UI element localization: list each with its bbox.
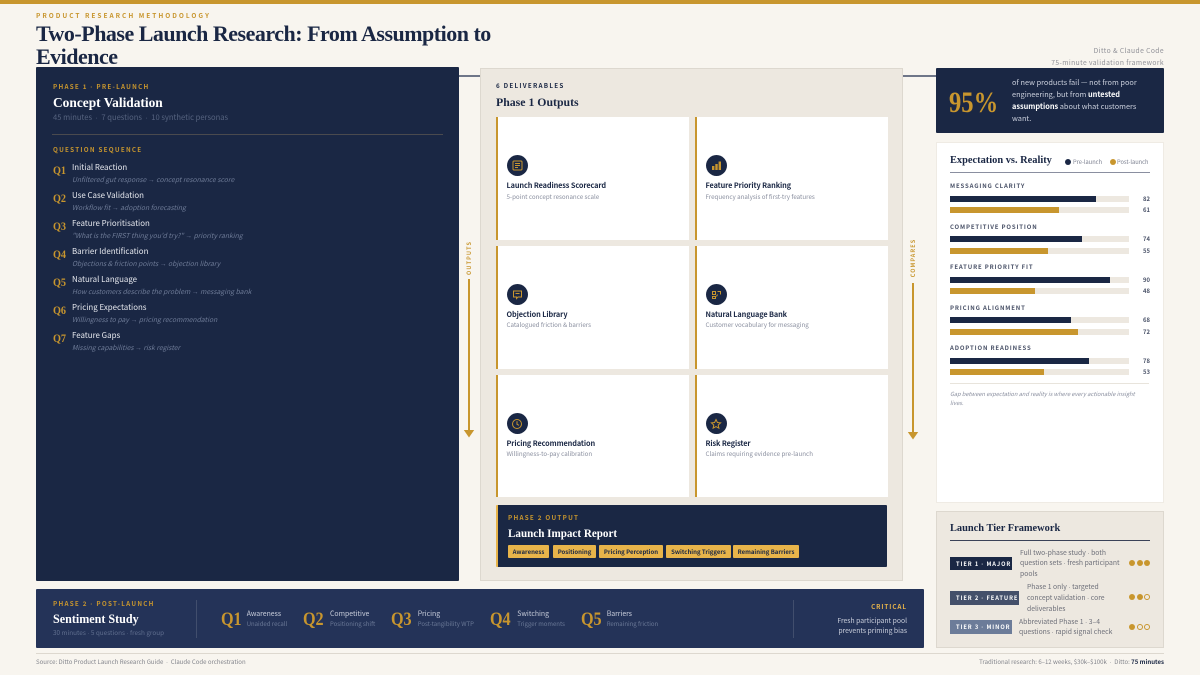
arrow: outputs: [464, 241, 474, 438]
phase 2 output label: PHASE 2 OUTPUT: [508, 513, 579, 522]
question Q2: [303, 608, 376, 630]
tier 3: TIER 3 · MINOR: [956, 622, 1011, 631]
header attribution: [1051, 45, 1164, 67]
callout: critical: CRITICAL: [871, 602, 907, 611]
tier 3: questions · rapid signal check: [1019, 626, 1112, 636]
arrow: compares: [908, 239, 918, 440]
Q4: [53, 246, 221, 268]
card: natural language: [695, 246, 888, 369]
tag: positioning: [553, 545, 596, 558]
tag: remaining barriers: [733, 545, 799, 558]
tier 2: [950, 581, 1150, 613]
tier 2: TIER 2 · FEATURE: [956, 593, 1018, 602]
chart title: Expectation vs. Reality: [950, 155, 1052, 166]
panel: phase 2 sentiment study: [36, 589, 924, 648]
icon: document: [506, 155, 528, 176]
card: risk register: Risk Register: [706, 439, 750, 449]
question Q3: Pricing: [418, 608, 440, 618]
report heading: Launch Impact Report: [508, 528, 617, 540]
phase 1 meta: 45 minutes · 7 questions · 10 synthetic personas: [53, 112, 228, 123]
card: pricing: Pricing Recommendation: [506, 439, 595, 449]
tag: pricing perception: [599, 545, 663, 558]
Q5: How customers describe the problem → messaging bank: [72, 286, 251, 296]
metric: pricing alignment: [950, 303, 1150, 336]
phase 1 label: PHASE 1 · PRE-LAUNCH: [53, 82, 150, 91]
metric: adoption readiness: [950, 343, 1150, 376]
metric: pricing alignment: PRICING ALIGNMENT: [950, 303, 1026, 312]
Q6: Pricing Expectations: [72, 302, 147, 313]
callout: critical: Fresh participant pool: [837, 614, 907, 624]
metric: messaging clarity: 82: [1143, 194, 1150, 203]
Q6: Q6: [53, 303, 66, 317]
stat description: engineering, but from untested: [1012, 89, 1120, 100]
chart note: lives.: [950, 398, 964, 407]
callout: critical: [837, 602, 907, 635]
title: Evidence: [36, 44, 118, 69]
metric: adoption readiness: 78: [1143, 356, 1150, 365]
Q7: [53, 330, 181, 352]
question sequence label: QUESTION SEQUENCE: [53, 145, 142, 154]
card: objection library: [496, 246, 689, 369]
stat description: assumptions about what customers: [1012, 101, 1136, 112]
icon: bars: [706, 155, 726, 176]
Q6: [53, 302, 218, 324]
tier 2: concept validation · core: [1027, 592, 1105, 602]
question Q4: [490, 608, 565, 630]
tier 1: [950, 546, 1150, 578]
Q2: Use Case Validation: [72, 190, 144, 201]
question Q1: Unaided recall: [247, 619, 287, 628]
tag: pricing perception: Pricing Perception: [604, 547, 658, 556]
metric: pricing alignment: 68: [1143, 315, 1150, 324]
stat description: of new products fail — not from poor: [1012, 77, 1137, 88]
outputs heading: Phase 1 Outputs: [496, 95, 579, 109]
tier 1: question sets · fresh participant: [1020, 557, 1120, 567]
card: risk register: Claims requiring evidence pre-launch: [706, 449, 813, 458]
Q3: "What is the FIRST thing you'd try?" → priority ranking: [72, 230, 243, 240]
icon: clock: [506, 413, 528, 434]
question Q2: Competitive: [330, 608, 369, 618]
question Q1: Q1: [221, 609, 242, 630]
Q1: Q1: [53, 163, 66, 177]
chart note: Gap between expectation and reality is where every actionable insight: [950, 389, 1135, 398]
Q2: Workflow fit → adoption forecasting: [72, 202, 186, 212]
Q5: Q5: [53, 275, 66, 289]
question Q4: Q4: [490, 609, 511, 630]
legend: Post-launch: [1117, 157, 1148, 166]
legend: [1065, 157, 1148, 166]
connector: left panel to outputs: [459, 75, 480, 76]
tier 2: deliverables: [1027, 603, 1065, 613]
metric: competitive position: 55: [1143, 246, 1150, 255]
panel: launch tier framework: [936, 511, 1164, 648]
metric: messaging clarity: MESSAGING CLARITY: [950, 181, 1025, 190]
panel: expectation vs reality chart: [936, 142, 1164, 503]
question Q2: Q2: [303, 609, 324, 630]
metric: messaging clarity: 61: [1143, 205, 1150, 214]
card: natural language: Customer vocabulary for messaging: [706, 320, 809, 329]
Q7: Missing capabilities → risk register: [72, 342, 180, 352]
question Q5: Remaining friction: [607, 619, 658, 628]
top accent bar: [0, 0, 1200, 4]
question Q3: Post-tangibility WTP: [418, 619, 474, 628]
tier 1: Full two-phase study · both: [1020, 546, 1106, 556]
Q1: Unfiltered gut response → concept resonance score: [72, 174, 234, 184]
metric: adoption readiness: 53: [1143, 367, 1150, 376]
question Q4: Switching: [517, 608, 549, 618]
card: pricing: Willingness-to-pay calibration: [506, 449, 592, 458]
metric: feature priority fit: 90: [1143, 275, 1150, 284]
metric: competitive position: 74: [1143, 234, 1150, 243]
question Q1: [221, 608, 287, 630]
callout: phase 2 output: [496, 505, 887, 567]
connector: outputs to stat: [903, 75, 936, 76]
tag: positioning: Positioning: [558, 547, 591, 556]
phase 2 label: PHASE 2 · POST-LAUNCH: [53, 599, 155, 608]
tier 2: Phase 1 only · targeted: [1027, 581, 1099, 591]
card: feature ranking: [695, 117, 888, 240]
outputs label: OUTPUTS: [465, 241, 473, 275]
metric: messaging clarity: [950, 181, 1150, 214]
stat description: want.: [1012, 113, 1031, 124]
Q2: Q2: [53, 191, 66, 205]
title: Two-Phase Launch Research: From Assumption to: [36, 21, 491, 46]
panel: phase 1 concept validation: [36, 67, 459, 581]
question Q1: Awareness: [247, 608, 281, 618]
question Q5: Barriers: [607, 608, 632, 618]
card: scorecard: 5-point concept resonance scale: [506, 192, 599, 201]
Q4: Objections & friction points → objection library: [72, 258, 220, 268]
card: feature ranking: Frequency analysis of first-try features: [706, 192, 815, 201]
tier 3: [950, 616, 1150, 636]
Q3: [53, 218, 244, 240]
Q4: Q4: [53, 247, 66, 261]
footer source: Source: Ditto Product Launch Research Guide · Claude Code orchestration: [36, 657, 246, 666]
callout: critical: prevents priming bias: [838, 625, 907, 635]
Q1: Initial Reaction: [72, 162, 127, 173]
Q5: Natural Language: [72, 274, 137, 285]
chart note: [950, 389, 1136, 407]
Q4: Barrier Identification: [72, 246, 148, 257]
icon: star: [706, 413, 726, 434]
card: scorecard: Launch Readiness Scorecard: [506, 181, 606, 191]
question Q5: [581, 608, 658, 630]
metric: feature priority fit: 48: [1143, 286, 1150, 295]
metric: feature priority fit: FEATURE PRIORITY FIT: [950, 262, 1033, 271]
card: objection library: Objection Library: [506, 310, 567, 320]
tier 1: pools: [1020, 568, 1038, 578]
card: feature ranking: Feature Priority Ranking: [706, 181, 791, 191]
metric: pricing alignment: 72: [1143, 327, 1150, 336]
Q3: Feature Prioritisation: [72, 218, 150, 229]
card: natural language: Natural Language Bank: [706, 310, 787, 320]
footer comparison: Traditional research: 6–12 weeks, $30k–$100k · Ditto: 75 minutes: [979, 657, 1164, 666]
metric: feature priority fit: [950, 262, 1150, 295]
Q7: Q7: [53, 331, 66, 345]
stat description: [1012, 77, 1137, 124]
tag: remaining barriers: Remaining Barriers: [738, 547, 794, 556]
icon: speech bubble: [506, 284, 528, 305]
question Q5: Q5: [581, 609, 601, 630]
deliverables label: 6 DELIVERABLES: [496, 81, 565, 90]
tag: switching triggers: [666, 545, 731, 558]
card: scorecard: [496, 117, 689, 240]
legend: Pre-launch: [1073, 157, 1102, 166]
metric: adoption readiness: ADOPTION READINESS: [950, 343, 1032, 352]
panel: 95 percent stat: [936, 68, 1164, 133]
card: risk register: [695, 375, 888, 497]
metric: competitive position: [950, 222, 1150, 255]
header attribution: Ditto & Claude Code: [1094, 45, 1164, 55]
phase 1 heading: Concept Validation: [53, 95, 163, 110]
tier 3: Abbreviated Phase 1 · 3–4: [1019, 616, 1100, 626]
Q6: Willingness to pay → pricing recommendation: [72, 314, 217, 324]
question Q3: Q3: [391, 609, 412, 630]
Q5: [53, 274, 252, 296]
Q3: Q3: [53, 219, 66, 233]
question Q4: Trigger moments: [517, 619, 565, 628]
tag: switching triggers: Switching Triggers: [671, 547, 726, 556]
icon: language: [706, 284, 726, 305]
card: objection library: Catalogued friction & barriers: [506, 320, 591, 329]
question list: [53, 162, 252, 352]
tag: awareness: [508, 545, 549, 558]
metric: competitive position: COMPETITIVE POSITION: [950, 222, 1038, 231]
tag: awareness: Awareness: [513, 547, 544, 556]
tier heading: Launch Tier Framework: [950, 523, 1060, 534]
compares label: COMPARES: [909, 239, 917, 277]
question Q3: [391, 608, 474, 630]
Q7: Feature Gaps: [72, 330, 120, 341]
tier 1: TIER 1 · MAJOR: [956, 559, 1011, 568]
stat number: 95%: [949, 86, 998, 119]
question Q2: Positioning shift: [330, 619, 375, 628]
header attribution: 75-minute validation framework: [1051, 57, 1164, 67]
Q2: [53, 190, 186, 212]
sentiment heading: Sentiment Study: [53, 612, 139, 626]
Q1: [53, 162, 234, 184]
title: [36, 21, 491, 69]
sentiment meta: 30 minutes · 5 questions · fresh group: [53, 628, 164, 637]
card: pricing: [496, 375, 689, 497]
panel: phase 1 outputs: [480, 68, 903, 581]
header eyebrow: PRODUCT RESEARCH METHODOLOGY: [36, 10, 211, 20]
